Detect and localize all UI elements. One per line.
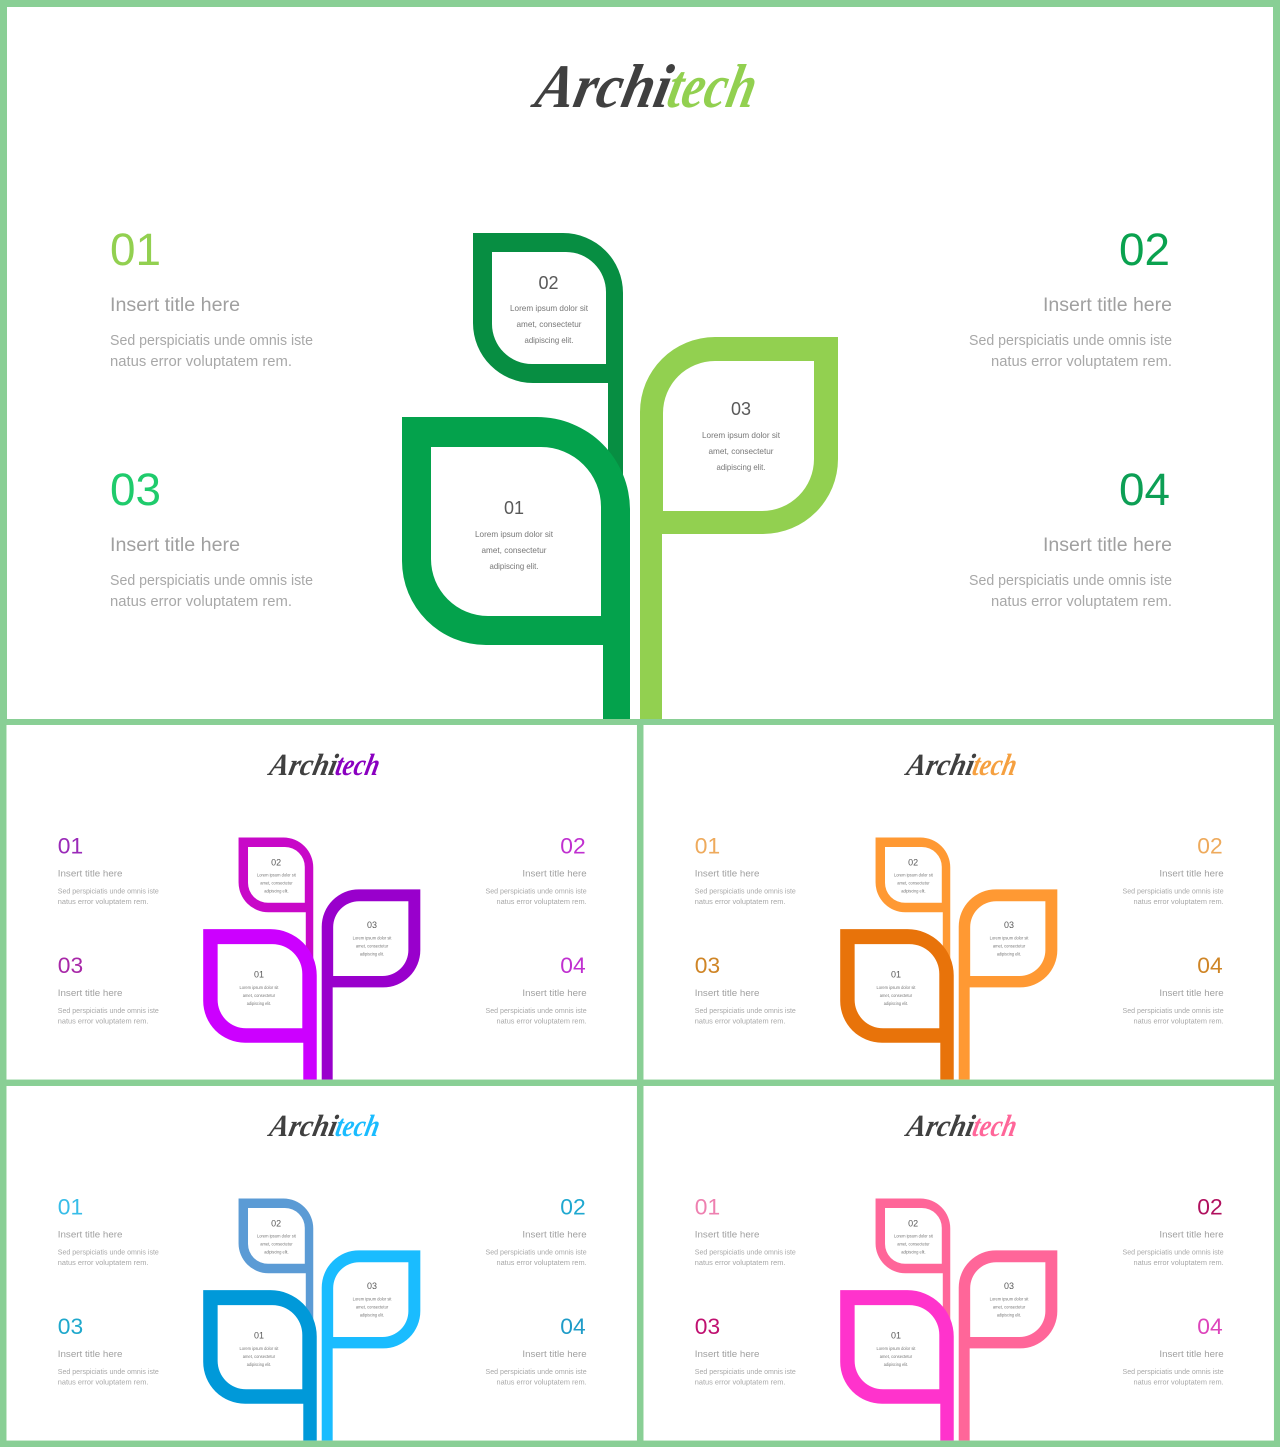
text block 01: natus error voluptatem rem. [58, 1258, 148, 1267]
leaf 03: amet, consectetur [708, 446, 774, 456]
text block 03: natus error voluptatem rem. [695, 1016, 785, 1025]
text block 04: Insert title here [1159, 988, 1224, 999]
text block 03 [58, 1314, 159, 1386]
text block 03: Insert title here [110, 535, 240, 556]
text block 02 [486, 833, 587, 906]
leaf 03: amet, consectetur [356, 944, 389, 949]
text block 01: Sed perspiciatis unde omnis iste [695, 886, 796, 895]
text block 01: 01 [695, 833, 720, 858]
text block 01: 01 [110, 224, 161, 275]
text block 03: Insert title here [695, 1349, 760, 1360]
text block 02: Sed perspiciatis unde omnis iste [1123, 1247, 1224, 1256]
text block 02 [1123, 1194, 1224, 1267]
text block 03: Insert title here [58, 988, 123, 999]
leaf 03: Lorem ipsum dolor sit [990, 936, 1029, 941]
text block 03: Sed perspiciatis unde omnis iste [58, 1006, 159, 1015]
logo: Archi [265, 747, 341, 782]
text block 01: Sed perspiciatis unde omnis iste [58, 886, 159, 895]
leaf 01: adipiscing elit. [490, 561, 538, 571]
leaf 01: amet, consectetur [880, 1354, 913, 1359]
text block 04: Insert title here [1159, 1349, 1224, 1360]
text block 04: natus error voluptatem rem. [1134, 1377, 1224, 1386]
text block 02: natus error voluptatem rem. [497, 1258, 587, 1267]
text block 01 [58, 833, 159, 906]
text block 04: natus error voluptatem rem. [1134, 1016, 1224, 1025]
text block 04 [1123, 1314, 1224, 1386]
logo: tech [970, 1108, 1020, 1143]
text block 04: Insert title here [1043, 535, 1172, 556]
leaf 01 [840, 929, 954, 1080]
text block 01: Insert title here [58, 868, 123, 879]
leaf 03 [322, 1250, 420, 1441]
leaf 03: 03 [731, 399, 751, 419]
leaf 01: Lorem ipsum dolor sit [240, 1346, 279, 1351]
text block 02: natus error voluptatem rem. [1134, 897, 1224, 906]
logo: tech [662, 52, 764, 121]
text block 02: 02 [1197, 833, 1223, 858]
panel: pink slide [643, 1086, 1274, 1441]
text block 03: 03 [58, 953, 83, 978]
text block 03: Insert title here [695, 988, 760, 999]
text block 03: natus error voluptatem rem. [695, 1377, 785, 1386]
text block 04: Sed perspiciatis unde omnis iste [1123, 1367, 1224, 1376]
leaf 03: 03 [367, 920, 377, 930]
logo [265, 1108, 383, 1143]
leaf 01 [402, 417, 630, 719]
text block 02: natus error voluptatem rem. [497, 897, 587, 906]
leaf 01: amet, consectetur [243, 993, 276, 998]
leaf 03: 03 [367, 1281, 377, 1291]
text block 03: Sed perspiciatis unde omnis iste [695, 1367, 796, 1376]
logo [526, 52, 764, 121]
text block 03: 03 [58, 1314, 83, 1339]
text block 04: 04 [1197, 1314, 1223, 1339]
leaf 02: adipiscing elit. [264, 1249, 289, 1254]
text block 03 [695, 1314, 796, 1386]
text block 01: Insert title here [695, 1229, 760, 1240]
text block 02: Sed perspiciatis unde omnis iste [969, 333, 1172, 349]
leaf 03 [640, 337, 838, 719]
text block 02: Insert title here [1159, 1229, 1224, 1240]
text block 02: natus error voluptatem rem. [991, 354, 1172, 370]
text block 03: Sed perspiciatis unde omnis iste [110, 573, 313, 589]
leaf 02 [876, 1199, 950, 1327]
leaf 03: amet, consectetur [993, 944, 1026, 949]
text block 04: Sed perspiciatis unde omnis iste [486, 1367, 587, 1376]
leaf 02: amet, consectetur [260, 880, 293, 885]
leaf 01: Lorem ipsum dolor sit [877, 1346, 916, 1351]
text block 04: Insert title here [522, 988, 587, 999]
text block 01: Sed perspiciatis unde omnis iste [695, 1247, 796, 1256]
leaf 01: adipiscing elit. [884, 1001, 908, 1006]
leaf 03: Lorem ipsum dolor sit [353, 1297, 392, 1302]
text block 02: 02 [560, 833, 586, 858]
logo: Archi [902, 1108, 978, 1143]
text block 01 [110, 224, 313, 370]
text block 03: Sed perspiciatis unde omnis iste [58, 1367, 159, 1376]
leaf 03: Lorem ipsum dolor sit [990, 1297, 1029, 1302]
panel: purple slide [6, 725, 637, 1080]
text block 04: Sed perspiciatis unde omnis iste [486, 1006, 587, 1015]
leaf 01: amet, consectetur [880, 993, 913, 998]
leaf 01 [203, 1290, 317, 1441]
leaf 01: Lorem ipsum dolor sit [240, 985, 279, 990]
text block 01: Sed perspiciatis unde omnis iste [110, 333, 313, 349]
logo [265, 747, 383, 782]
text block 03: natus error voluptatem rem. [110, 594, 292, 610]
leaf 03: adipiscing elit. [716, 462, 766, 472]
leaf 02: adipiscing elit. [901, 1249, 926, 1254]
leaf 02: amet, consectetur [516, 319, 582, 329]
text block 04: 04 [560, 1314, 586, 1339]
leaf 02: 02 [271, 857, 281, 867]
text block 01: natus error voluptatem rem. [58, 897, 148, 906]
text block 04: 04 [560, 953, 586, 978]
text block 01: Insert title here [110, 295, 240, 316]
text block 03: natus error voluptatem rem. [58, 1016, 148, 1025]
text block 02: Insert title here [522, 1229, 587, 1240]
leaf 02 [239, 1199, 313, 1327]
text block 02: Insert title here [1159, 868, 1224, 879]
leaf 02: amet, consectetur [897, 1241, 930, 1246]
leaf 02: Lorem ipsum dolor sit [257, 1233, 297, 1238]
text block 01 [695, 1194, 796, 1267]
leaf 01: amet, consectetur [243, 1354, 276, 1359]
logo [902, 747, 1020, 782]
text block 04 [1123, 953, 1224, 1025]
text block 01: Insert title here [695, 868, 760, 879]
text block 04: Sed perspiciatis unde omnis iste [1123, 1006, 1224, 1015]
text block 04: Sed perspiciatis unde omnis iste [969, 573, 1172, 589]
leaf 02: 02 [271, 1218, 281, 1228]
leaf 02: 02 [908, 857, 918, 867]
leaf 03: Lorem ipsum dolor sit [353, 936, 392, 941]
logo: tech [333, 747, 383, 782]
leaf 01 [840, 1290, 954, 1441]
leaf 03: adipiscing elit. [997, 1313, 1021, 1318]
text block 02: 02 [1119, 224, 1170, 275]
text block 01: natus error voluptatem rem. [695, 1258, 785, 1267]
text block 03: Sed perspiciatis unde omnis iste [695, 1006, 796, 1015]
text block 01: Sed perspiciatis unde omnis iste [58, 1247, 159, 1256]
logo: tech [970, 747, 1020, 782]
text block 03 [58, 953, 159, 1025]
text block 02: Insert title here [522, 868, 587, 879]
leaf 02: Lorem ipsum dolor sit [894, 1233, 934, 1238]
leaf 01: 01 [254, 1330, 264, 1340]
text block 03 [695, 953, 796, 1025]
leaf 02: amet, consectetur [897, 880, 930, 885]
leaf 03: adipiscing elit. [997, 952, 1021, 957]
leaf 02: adipiscing elit. [264, 888, 289, 893]
leaf 01: Lorem ipsum dolor sit [877, 985, 916, 990]
text block 04 [486, 953, 587, 1025]
leaf 03: adipiscing elit. [360, 1313, 384, 1318]
text block 03: 03 [695, 1314, 720, 1339]
leaf 01: adipiscing elit. [247, 1362, 271, 1367]
leaf 03 [322, 889, 420, 1080]
leaf 02: Lorem ipsum dolor sit [894, 872, 934, 877]
leaf 03: amet, consectetur [993, 1305, 1026, 1310]
logo [902, 1108, 1020, 1143]
text block 04: natus error voluptatem rem. [991, 594, 1172, 610]
text block 01: 01 [58, 1194, 83, 1219]
leaf 02 [876, 838, 950, 966]
leaf 01: Lorem ipsum dolor sit [475, 529, 554, 539]
leaf 01: 01 [254, 969, 264, 979]
text block 02 [486, 1194, 587, 1267]
text block 02: Insert title here [1043, 295, 1172, 316]
leaf 01 [203, 929, 317, 1080]
leaf 02: Lorem ipsum dolor sit [510, 303, 589, 313]
logo: Archi [265, 1108, 341, 1143]
text block 01: 01 [695, 1194, 720, 1219]
text block 03: natus error voluptatem rem. [58, 1377, 148, 1386]
panel: orange slide [643, 725, 1274, 1080]
text block 02: natus error voluptatem rem. [1134, 1258, 1224, 1267]
leaf 02: Lorem ipsum dolor sit [257, 872, 297, 877]
text block 02: 02 [1197, 1194, 1223, 1219]
leaf 01: 01 [504, 498, 524, 518]
text block 01 [695, 833, 796, 906]
leaf 01: 01 [891, 969, 901, 979]
leaf 02: 02 [908, 1218, 918, 1228]
leaf 01: adipiscing elit. [884, 1362, 908, 1367]
text block 04: 04 [1197, 953, 1223, 978]
leaf 03: 03 [1004, 1281, 1014, 1291]
leaf 02 [473, 233, 623, 490]
text block 04: 04 [1119, 464, 1170, 515]
leaf 01: 01 [891, 1330, 901, 1340]
leaf 03: 03 [1004, 920, 1014, 930]
logo: Archi [902, 747, 978, 782]
leaf 02 [239, 838, 313, 966]
leaf 03 [959, 1250, 1057, 1441]
logo: tech [333, 1108, 383, 1143]
text block 04: natus error voluptatem rem. [497, 1016, 587, 1025]
text block 03: Insert title here [58, 1349, 123, 1360]
leaf 02: adipiscing elit. [901, 888, 926, 893]
text block 02 [969, 224, 1172, 370]
leaf 02: 02 [538, 273, 559, 293]
text block 02: Sed perspiciatis unde omnis iste [486, 1247, 587, 1256]
text block 01: natus error voluptatem rem. [110, 354, 292, 370]
text block 04: Insert title here [522, 1349, 587, 1360]
leaf 03: Lorem ipsum dolor sit [702, 430, 781, 440]
text block 02: Sed perspiciatis unde omnis iste [486, 886, 587, 895]
text block 02 [1123, 833, 1224, 906]
panel: blue slide [6, 1086, 637, 1441]
leaf 01: amet, consectetur [482, 545, 547, 555]
text block 03 [110, 464, 313, 610]
leaf 02: adipiscing elit. [524, 335, 574, 345]
leaf 03: amet, consectetur [356, 1305, 389, 1310]
text block 01: Insert title here [58, 1229, 123, 1240]
leaf 02: amet, consectetur [260, 1241, 293, 1246]
leaf 01: adipiscing elit. [247, 1001, 271, 1006]
text block 03: 03 [695, 953, 720, 978]
logo: Archi [526, 52, 679, 121]
text block 02: Sed perspiciatis unde omnis iste [1123, 886, 1224, 895]
leaf 03 [959, 889, 1057, 1080]
panel: green main slide [7, 7, 1273, 719]
text block 01: 01 [58, 833, 83, 858]
text block 04 [486, 1314, 587, 1386]
leaf 03: adipiscing elit. [360, 952, 384, 957]
text block 04: natus error voluptatem rem. [497, 1377, 587, 1386]
text block 02: 02 [560, 1194, 586, 1219]
text block 01: natus error voluptatem rem. [695, 897, 785, 906]
text block 01 [58, 1194, 159, 1267]
text block 04 [969, 464, 1172, 610]
text block 03: 03 [110, 464, 161, 515]
